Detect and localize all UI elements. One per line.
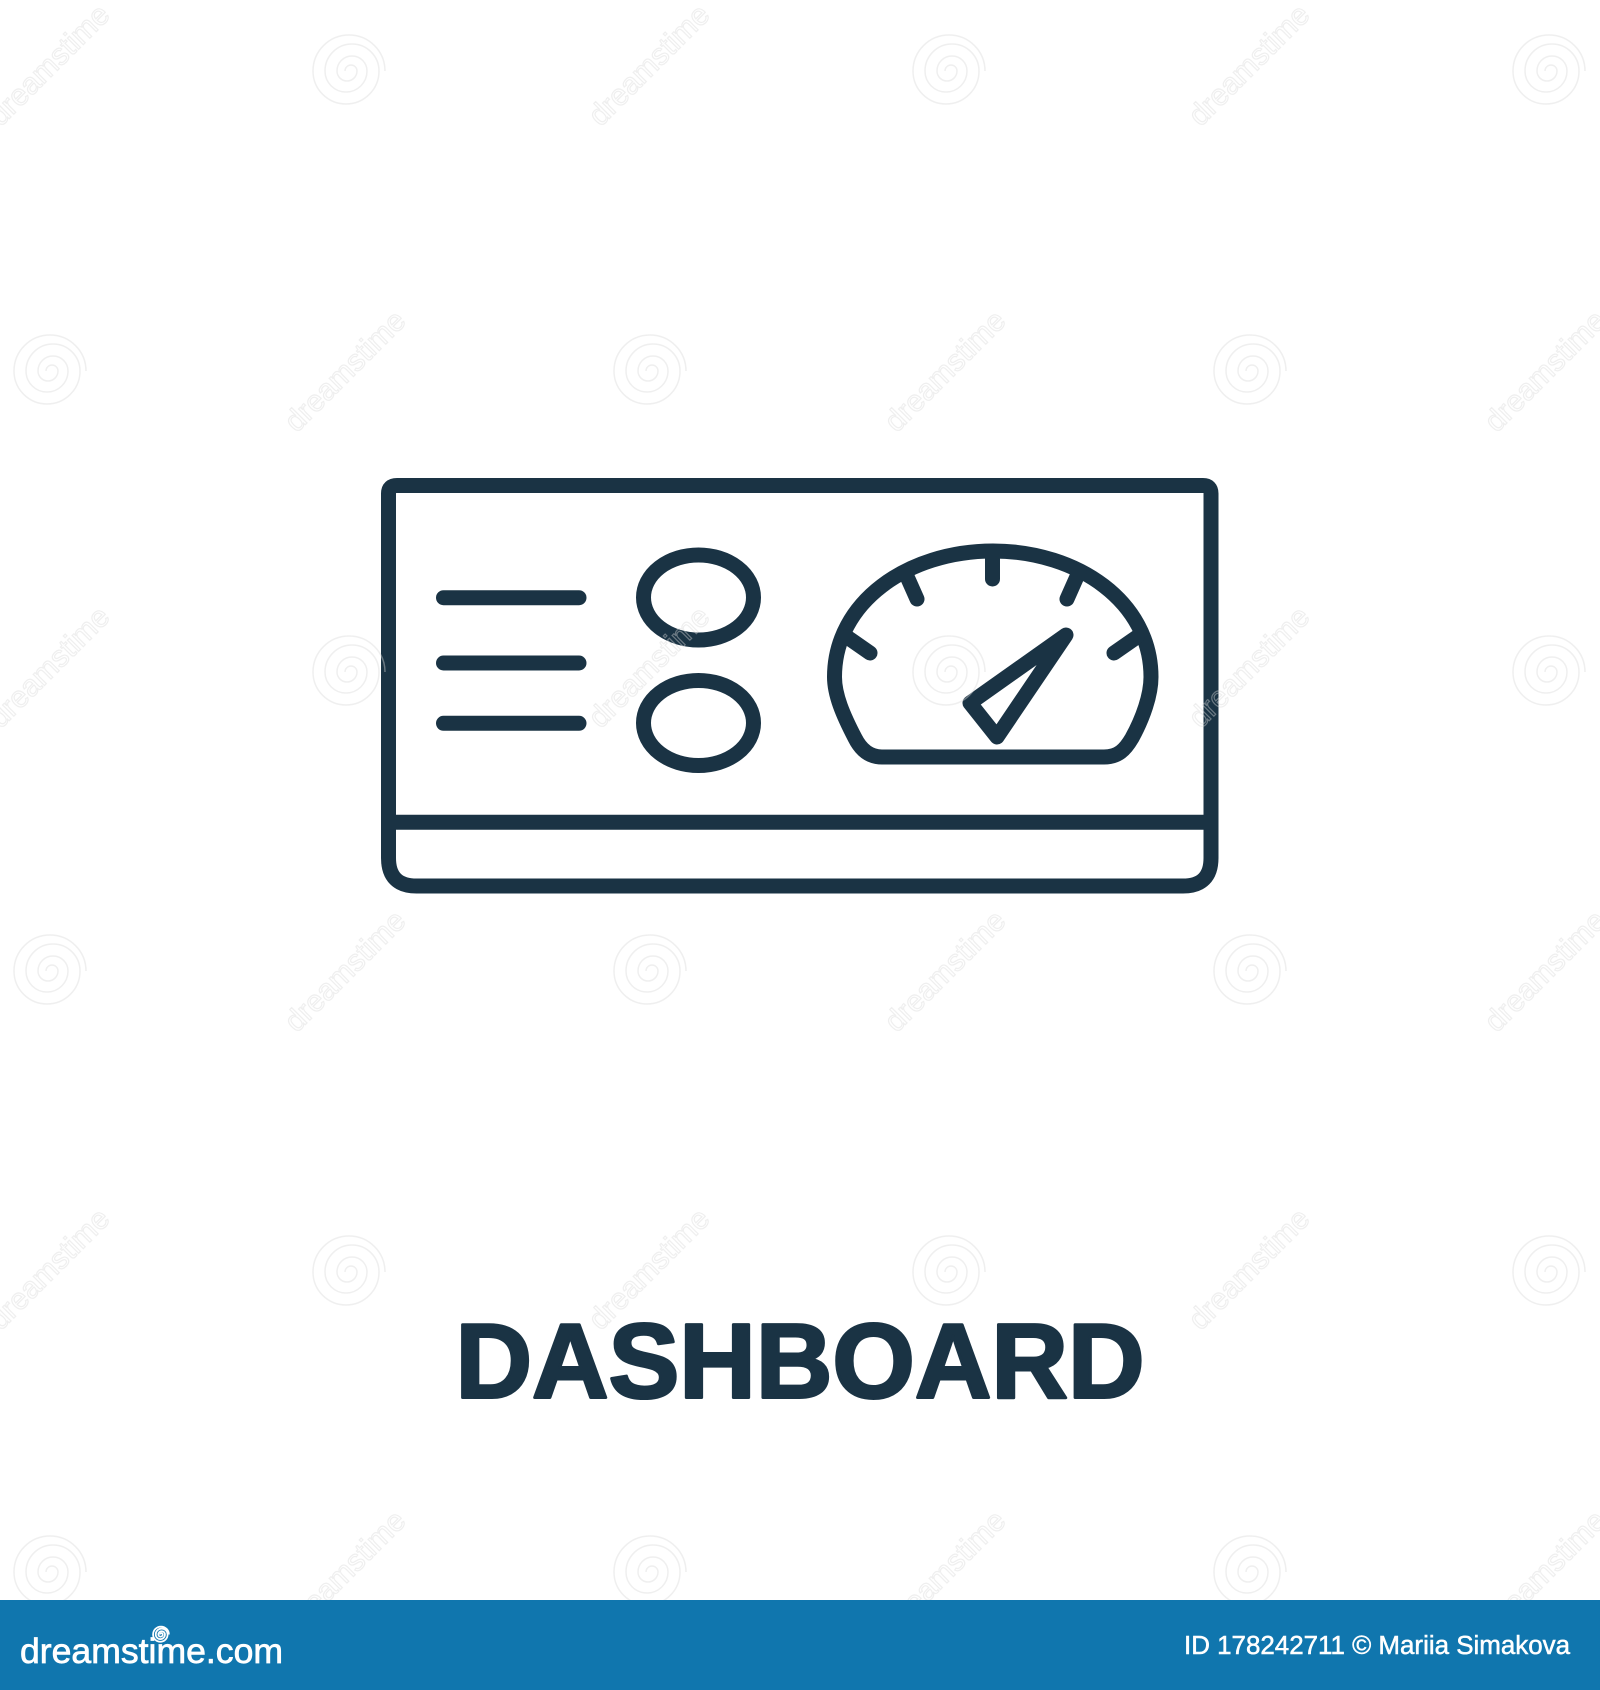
title: DASHBOARD <box>456 1302 1144 1420</box>
watermark pattern: dreamstime <box>878 304 1012 438</box>
watermark pattern: dreamstime <box>878 1504 1012 1638</box>
gauge needle <box>970 635 1066 737</box>
watermark pattern: dreamstime <box>278 304 412 438</box>
watermark pattern: dreamstime <box>1182 1202 1316 1336</box>
footer logo: dreamstime.com <box>20 1632 283 1671</box>
watermark pattern: dreamstime <box>582 0 716 132</box>
watermark pattern: dreamstime <box>278 1504 412 1638</box>
gauge <box>834 551 1151 757</box>
buttons <box>644 555 754 766</box>
image credit: ID 178242711 © Mariia Simakova <box>1184 1632 1571 1660</box>
menu lines <box>444 598 579 723</box>
icon: dashboard panel <box>388 486 1211 886</box>
watermark pattern: dreamstime <box>582 1202 716 1336</box>
watermark pattern: dreamstime <box>1182 600 1316 734</box>
panel divider <box>388 815 1211 830</box>
watermark pattern: dreamstime <box>1182 0 1316 132</box>
gauge outline <box>834 551 1151 757</box>
icon: logo swirl <box>153 1627 169 1642</box>
panel frame <box>388 486 1211 886</box>
watermark pattern: dreamstime <box>278 904 412 1038</box>
gauge ticks <box>847 552 1137 653</box>
watermark pattern: dreamstime <box>878 904 1012 1038</box>
watermark pattern: dreamstime <box>582 600 716 734</box>
footer bar <box>0 1600 1600 1690</box>
